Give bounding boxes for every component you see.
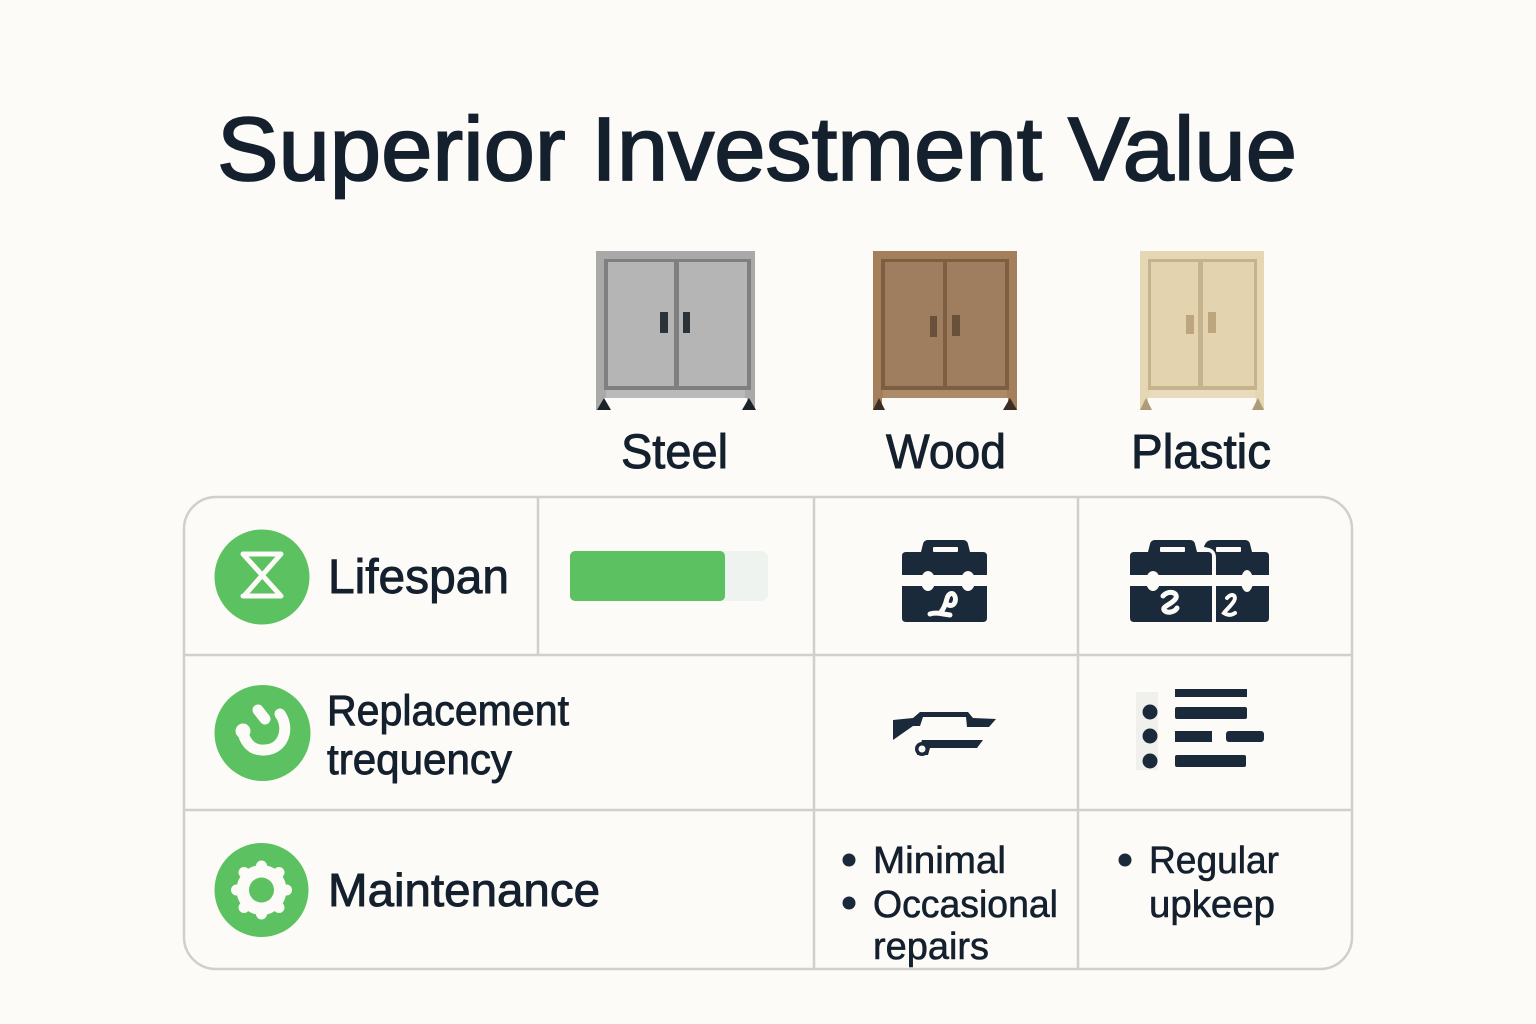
label: replacement trequency: trequency <box>327 736 512 784</box>
list: plastic maintenance: Regular <box>1149 840 1279 882</box>
icon: steel cabinet <box>596 251 756 410</box>
icon: hourglass <box>214 530 310 624</box>
list: wood maintenance: Minimal <box>873 840 1006 882</box>
column: plastic cabinet <box>1131 251 1271 479</box>
list: wood maintenance: repairs <box>873 926 989 968</box>
icon: two toolboxes, plastic <box>1130 540 1269 622</box>
label: lifespan: Lifespan <box>328 551 509 604</box>
label: plastic: Plastic <box>1131 426 1271 479</box>
comparison table frame <box>184 497 1352 969</box>
label: steel: Steel <box>621 426 728 479</box>
icon: short wrench, wood <box>893 712 996 756</box>
list: plastic maintenance: upkeep <box>1149 884 1275 926</box>
label: replacement trequency <box>327 687 569 784</box>
column: steel cabinet <box>596 251 756 479</box>
bar: steel lifespan <box>570 551 768 601</box>
list: plastic maintenance <box>1118 840 1279 926</box>
row: maintenance <box>214 840 1279 968</box>
icon: gear <box>214 843 308 937</box>
label: replacement trequency: Replacement <box>327 687 569 735</box>
icon: list, plastic <box>1136 689 1264 770</box>
row: replacement frequency <box>214 685 1264 784</box>
list: wood maintenance: Occasional <box>873 884 1058 926</box>
label: maintenance: Maintenance <box>328 864 600 916</box>
icon: replacement cycle <box>214 685 310 781</box>
icon: wood cabinet <box>873 251 1017 410</box>
label: wood: Wood <box>886 426 1006 479</box>
column: wood cabinet <box>873 251 1017 479</box>
icon: plastic cabinet <box>1140 251 1264 410</box>
list: wood maintenance <box>842 840 1058 968</box>
icon: one toolbox, wood <box>902 540 987 622</box>
row: lifespan <box>214 530 1269 624</box>
title: Superior Investment Value <box>217 100 1297 200</box>
